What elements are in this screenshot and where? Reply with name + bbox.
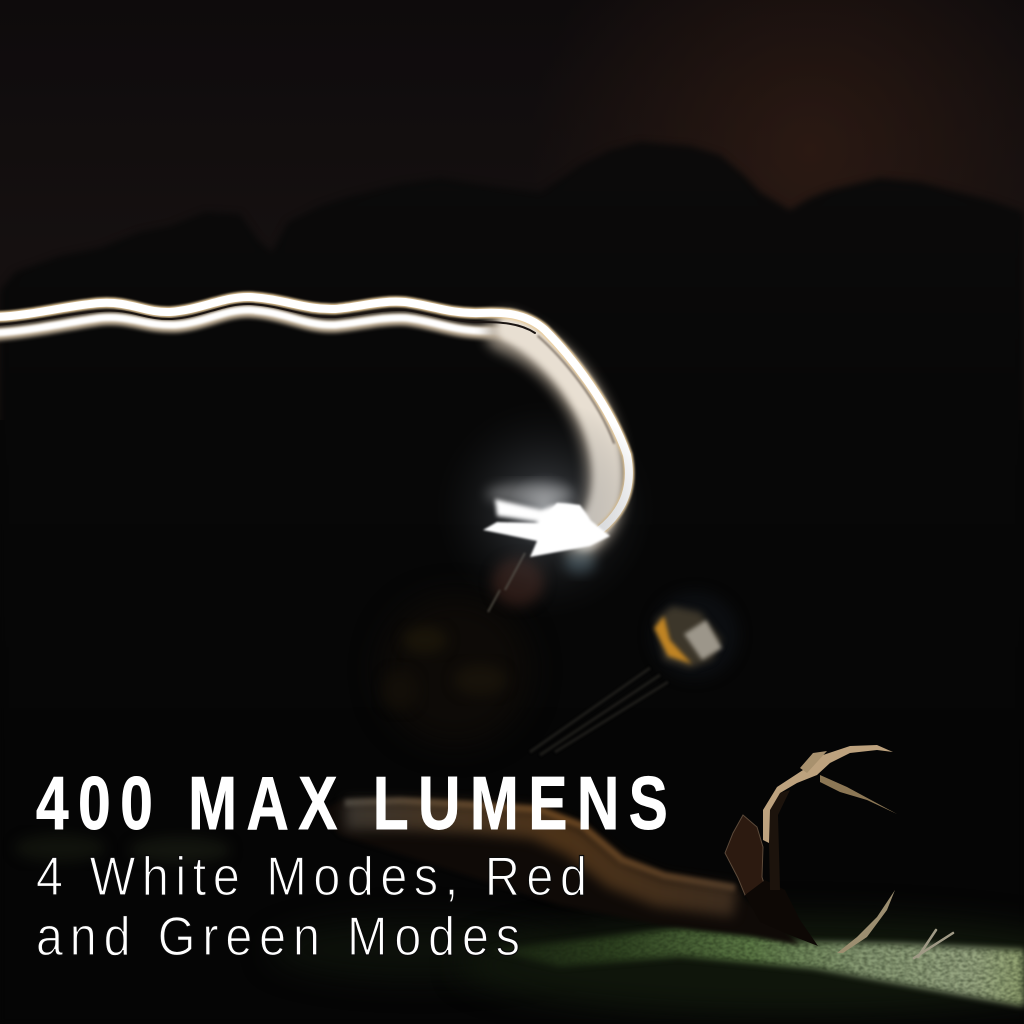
curved band glow [505, 332, 606, 538]
dark crease between trails [0, 304, 535, 333]
deer body [320, 798, 800, 945]
antlers [763, 745, 953, 958]
subheading line one: 4 White Modes, Red [36, 845, 587, 907]
night sky [0, 0, 1024, 420]
grass lit by headlamp [460, 915, 1024, 1015]
lower trail glow [0, 311, 525, 340]
headlamp light trail [0, 297, 629, 538]
deer back soft shading [345, 815, 735, 902]
heading: 400 MAX LUMENS [36, 762, 668, 846]
subheading line two: and Green Modes [36, 905, 520, 967]
headlamp flash [435, 400, 655, 620]
ground shrubs [15, 834, 570, 980]
deer ear [725, 815, 766, 895]
upper trail core [0, 297, 629, 530]
deer head [745, 880, 818, 946]
caption [36, 762, 668, 967]
upper trail halo [0, 297, 629, 530]
hunter silhouette [380, 553, 544, 745]
curved band [512, 328, 608, 536]
compound bow [530, 591, 739, 755]
lower trail core [0, 310, 525, 338]
deer back rim [345, 801, 735, 888]
